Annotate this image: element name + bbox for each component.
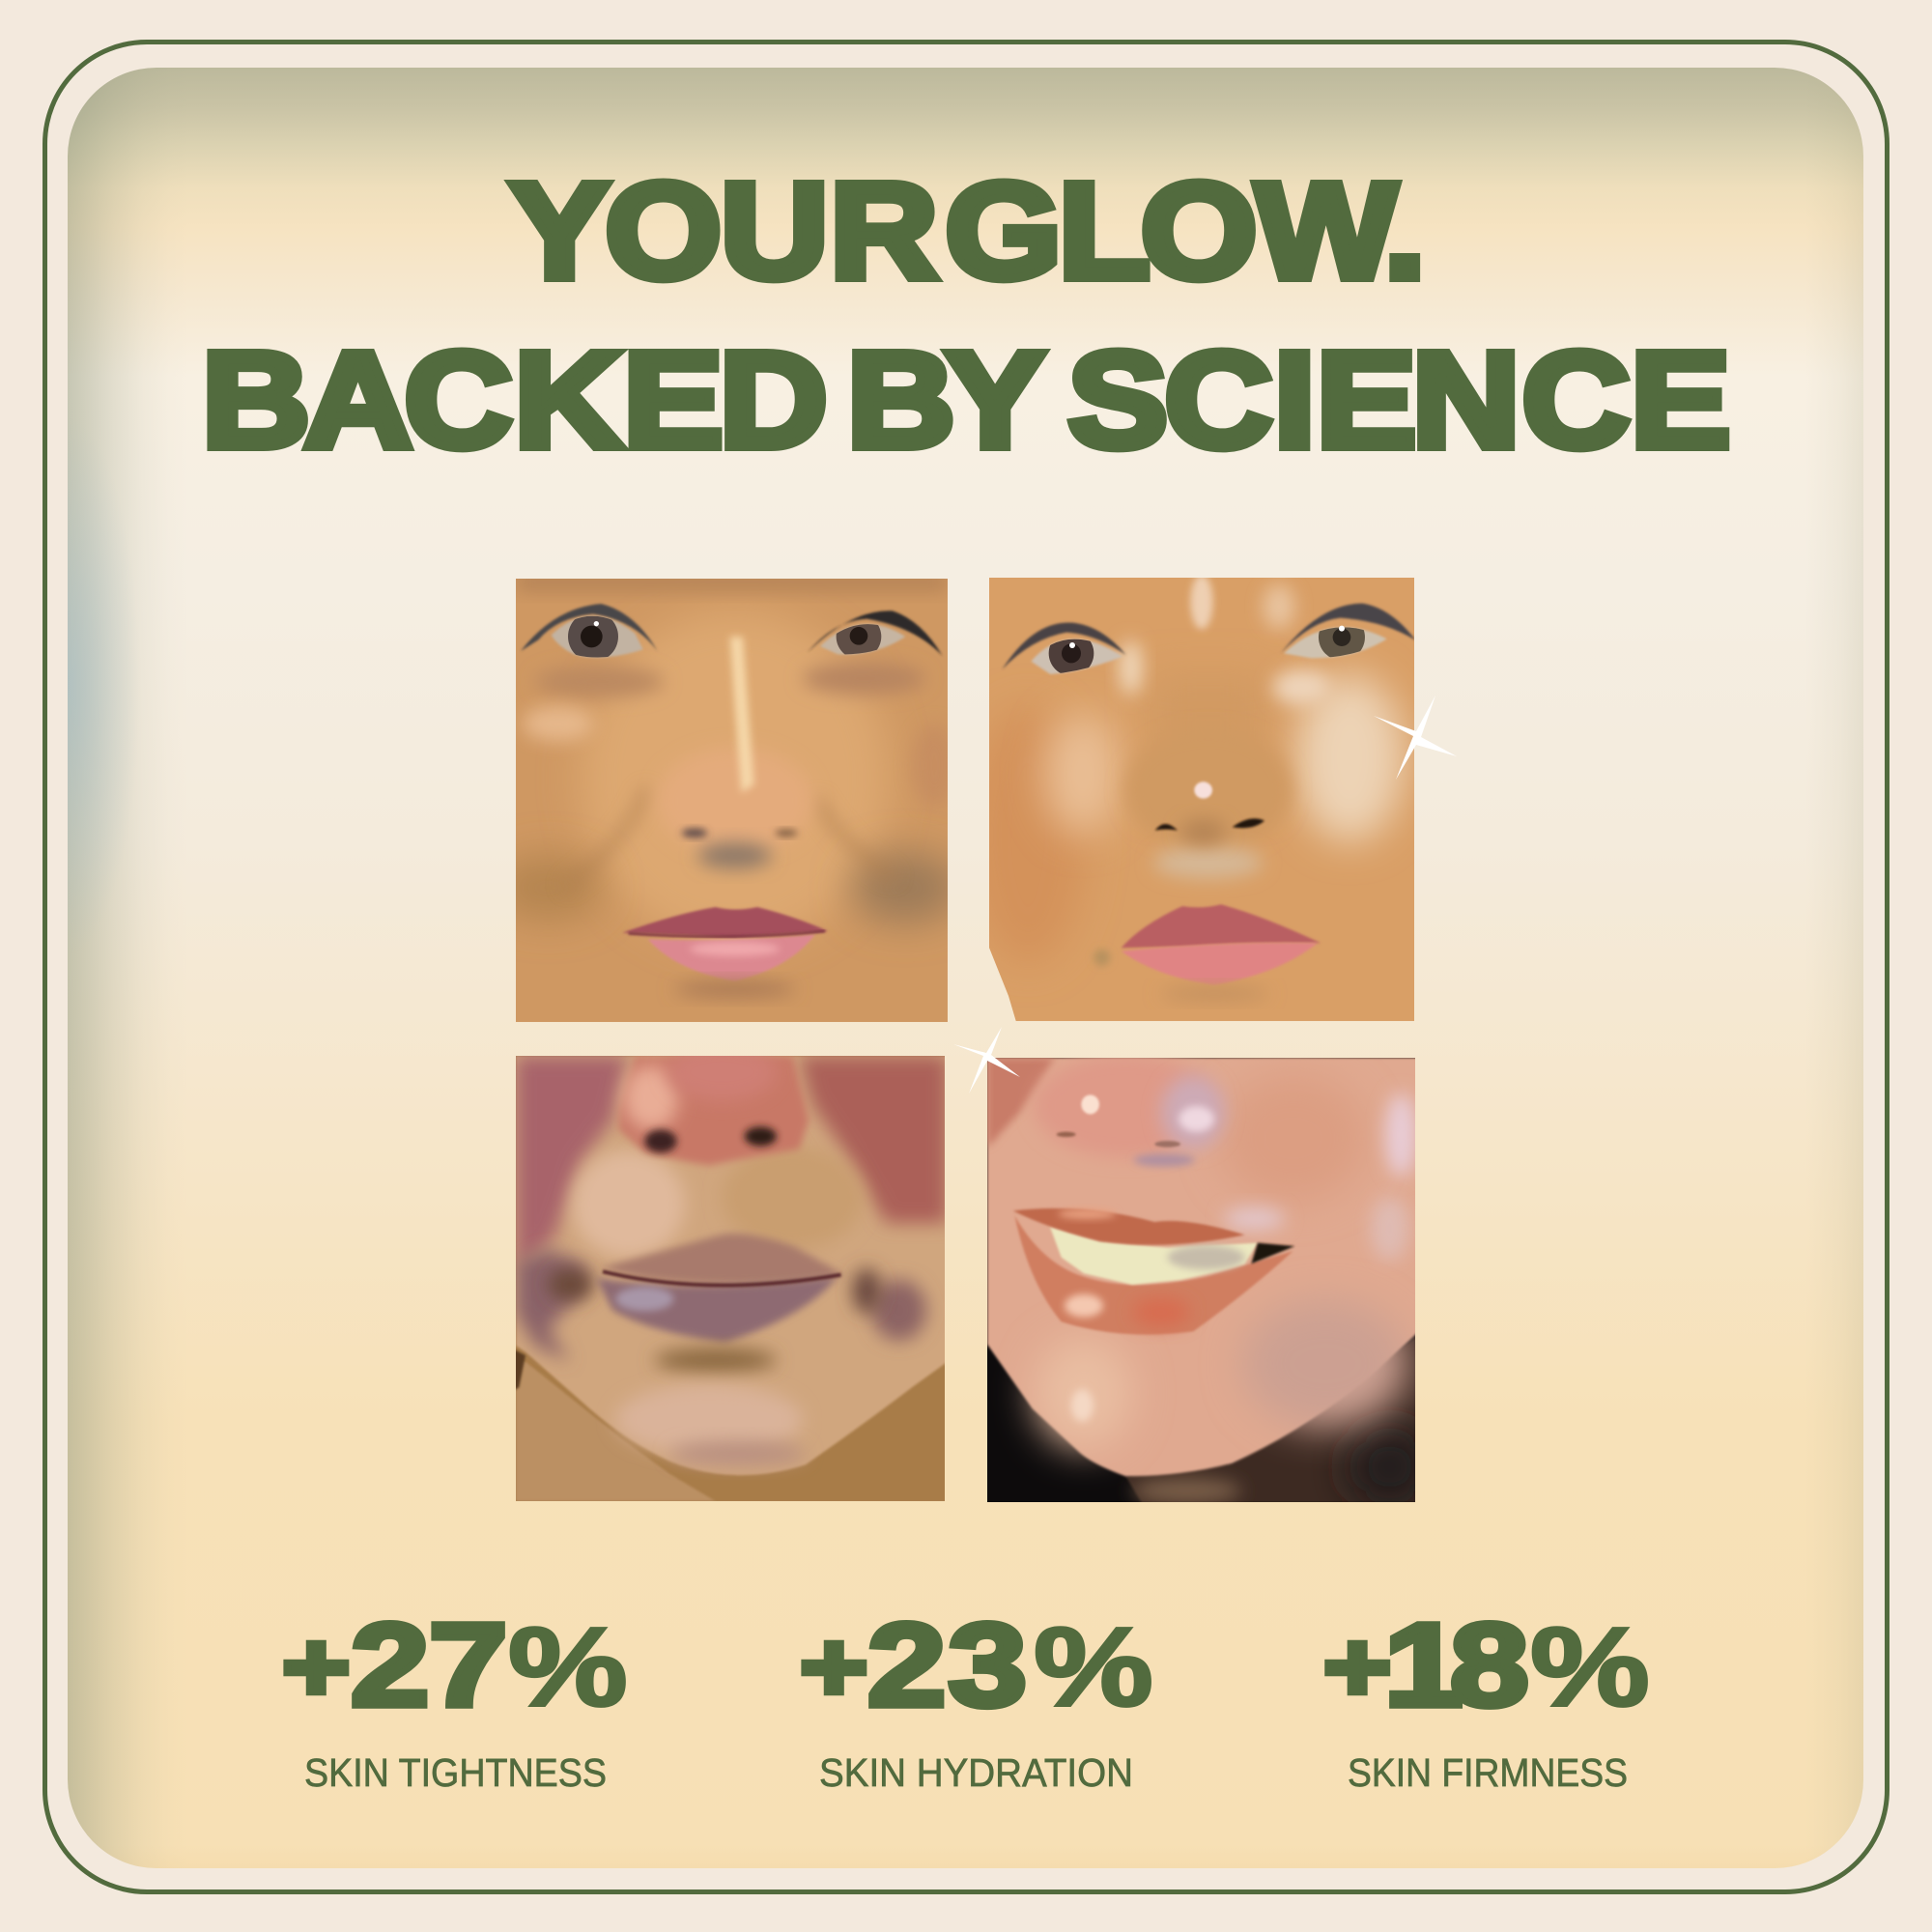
- stat value +18%: %: [1530, 1605, 1650, 1730]
- stat value +27%: +: [282, 1613, 350, 1721]
- photo: after, upper face: [970, 575, 1421, 1021]
- stat label: SKIN FIRMNESS: [1348, 1750, 1628, 1795]
- stat value +18%: +: [1323, 1613, 1391, 1721]
- title: BACKED BY SCIENCE: [202, 325, 1730, 476]
- photo: before, upper face: [494, 572, 960, 1022]
- stat value +23%: %: [1034, 1605, 1153, 1730]
- icon: sparkle center: [953, 1027, 1020, 1094]
- photo: before, lower face: [513, 1043, 948, 1501]
- stat value +27%: %: [508, 1605, 628, 1730]
- stat value +18%: 18: [1384, 1599, 1529, 1731]
- title: [202, 156, 1730, 476]
- icon: sparkle upper right: [1374, 696, 1457, 780]
- stat value +23%: +: [800, 1613, 867, 1721]
- stat label: SKIN TIGHTNESS: [304, 1750, 607, 1795]
- stat label: SKIN HYDRATION: [819, 1750, 1133, 1795]
- stat value +27%: 27: [351, 1599, 507, 1731]
- stat: skin tightness: [282, 1599, 628, 1795]
- stat: skin firmness: [1323, 1599, 1650, 1795]
- stat value +23%: 23: [867, 1599, 1027, 1731]
- stat: skin hydration: [800, 1599, 1153, 1795]
- photo: after, lower face: [987, 1055, 1432, 1509]
- title: YOUR GLOW.: [509, 156, 1426, 307]
